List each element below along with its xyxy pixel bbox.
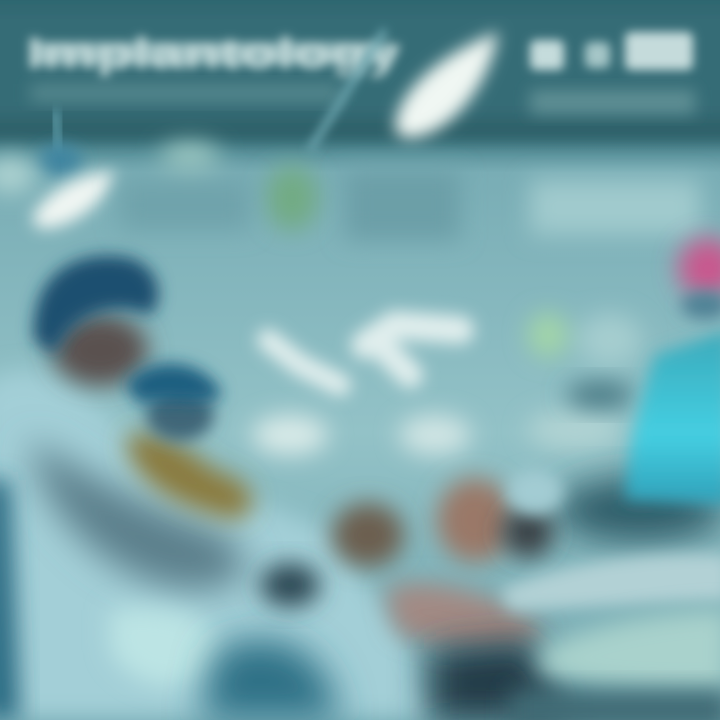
header band (0, 0, 720, 142)
surgeon head (52, 314, 148, 386)
header right title (530, 32, 693, 70)
surgeon cap (34, 256, 158, 355)
central chart strokes (268, 325, 460, 385)
patient (260, 470, 570, 720)
upper panels (0, 143, 700, 240)
leaf icon (395, 32, 498, 138)
header right subtitle (530, 90, 695, 114)
green icon (266, 166, 318, 230)
title subtitle (30, 84, 340, 102)
central labels (252, 313, 642, 455)
operating table (500, 554, 720, 720)
surgeon left (0, 256, 430, 720)
title: Implantology (26, 29, 402, 78)
stems and small leaf icon (32, 30, 385, 228)
second surgeon (125, 364, 252, 520)
monitor (555, 238, 720, 542)
